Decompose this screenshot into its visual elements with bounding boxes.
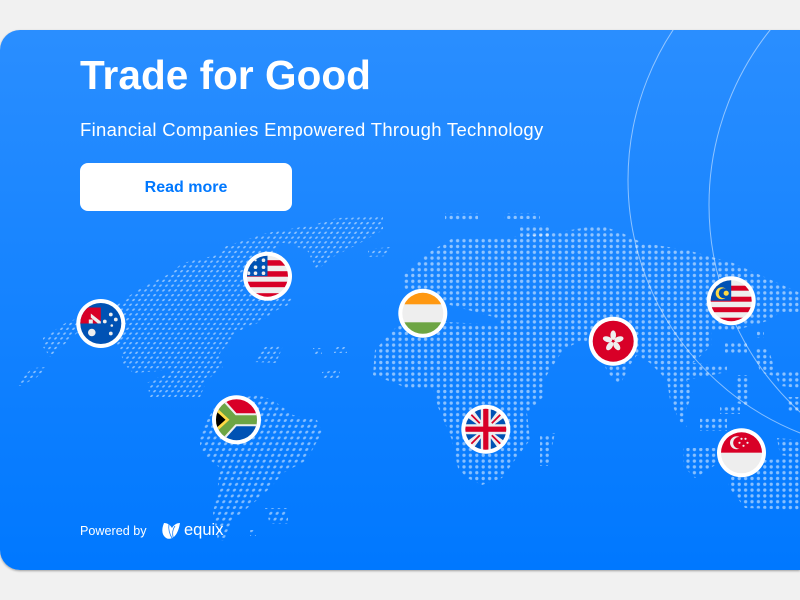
flag: India [398,289,447,338]
decorative arcs [628,30,800,434]
icon: equix leaf logo [162,523,180,539]
South America [200,395,322,541]
dotted world map [16,213,800,541]
North and Central America [16,217,390,397]
powered by label: Powered by [80,524,147,538]
flag: United Kingdom [461,405,510,454]
flag: Malaysia [707,276,756,325]
title: Trade for Good [80,52,371,98]
flag: Singapore [717,428,766,477]
button: read more: Read more [145,179,227,196]
button: read more [80,163,292,211]
Eurasia, Africa and islands [373,213,800,510]
equix wordmark: equix [184,521,223,539]
flag: Australia [76,299,125,348]
flag: South Africa [212,395,261,444]
flag: United States [243,252,292,301]
flag: Hong Kong [589,317,638,366]
subtitle: Financial Companies Empowered Through Technology [80,119,544,140]
